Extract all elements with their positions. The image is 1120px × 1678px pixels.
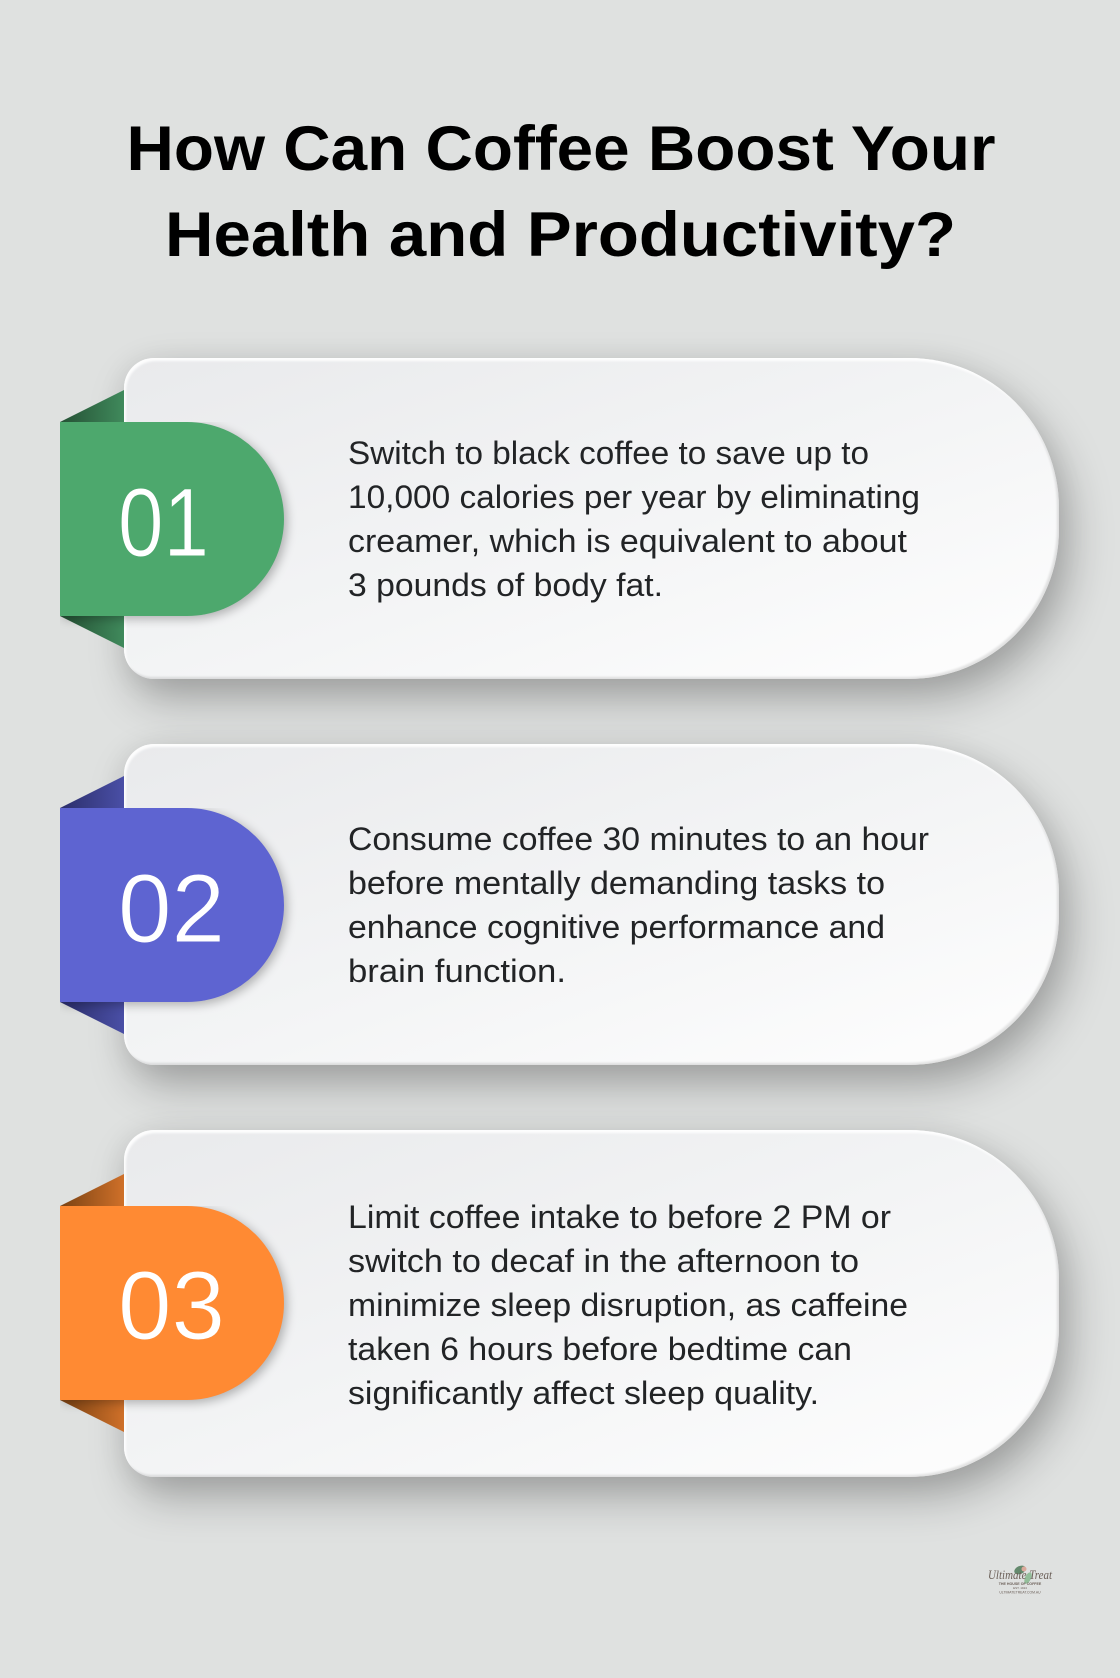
title: Health and Productivity? [165, 200, 956, 270]
number 01: 01 [118, 468, 209, 577]
text: step 3: significantly affect sleep quality. [348, 1375, 819, 1411]
text: step 3: minimize sleep disruption, as caffeine [348, 1287, 908, 1323]
text: step 3: taken 6 hours before bedtime can [348, 1331, 852, 1367]
text: step 3: switch to decaf in the afternoon to [348, 1243, 859, 1279]
logo wordmark [988, 1567, 1052, 1594]
fold bottom 2 [60, 1002, 124, 1034]
text: step 1: Switch to black coffee to save up to [348, 435, 869, 471]
fold top 2 [60, 776, 124, 808]
logo wordmark: Ultimate Treat [988, 1567, 1052, 1582]
fold bottom 3 [60, 1400, 124, 1432]
card background 1 [124, 358, 1059, 679]
fold top 1 [60, 390, 124, 422]
text: step 2: Consume coffee 30 minutes to an hour [348, 821, 929, 857]
card background 3 [124, 1130, 1059, 1477]
card background 2 [124, 744, 1059, 1065]
badge 1 [60, 422, 284, 616]
panel: step 3 [60, 1121, 1092, 1520]
fold top 3 [60, 1174, 124, 1206]
badge 2 [60, 808, 284, 1002]
icon: leaves [1013, 1564, 1033, 1585]
panel: step 2 [60, 735, 1091, 1108]
logo wordmark: ULTIMATETREAT.COM.AU [999, 1590, 1041, 1594]
text: step 2: before mentally demanding tasks to [348, 865, 885, 901]
text: step 1: 10,000 calories per year by eliminating [348, 479, 920, 515]
fold bottom 1 [60, 616, 124, 648]
text: step 2: enhance cognitive performance and [348, 909, 885, 945]
logo wordmark: EST. 1924 [1013, 1586, 1027, 1590]
panel: step 1 [60, 349, 1091, 722]
text: step 1: creamer, which is equivalent to about [348, 523, 907, 559]
text: step 1: 3 pounds of body fat. [348, 567, 663, 603]
title [126, 114, 996, 270]
text: step 3: Limit coffee intake to before 2 PM or [348, 1199, 891, 1235]
badge 3 [60, 1206, 284, 1400]
title: How Can Coffee Boost Your [126, 114, 996, 184]
logo wordmark: THE HOUSE OF COFFEE [999, 1582, 1042, 1586]
text: step 2: brain function. [348, 953, 566, 989]
number 02: 02 [118, 854, 225, 963]
number 03: 03 [118, 1251, 225, 1360]
